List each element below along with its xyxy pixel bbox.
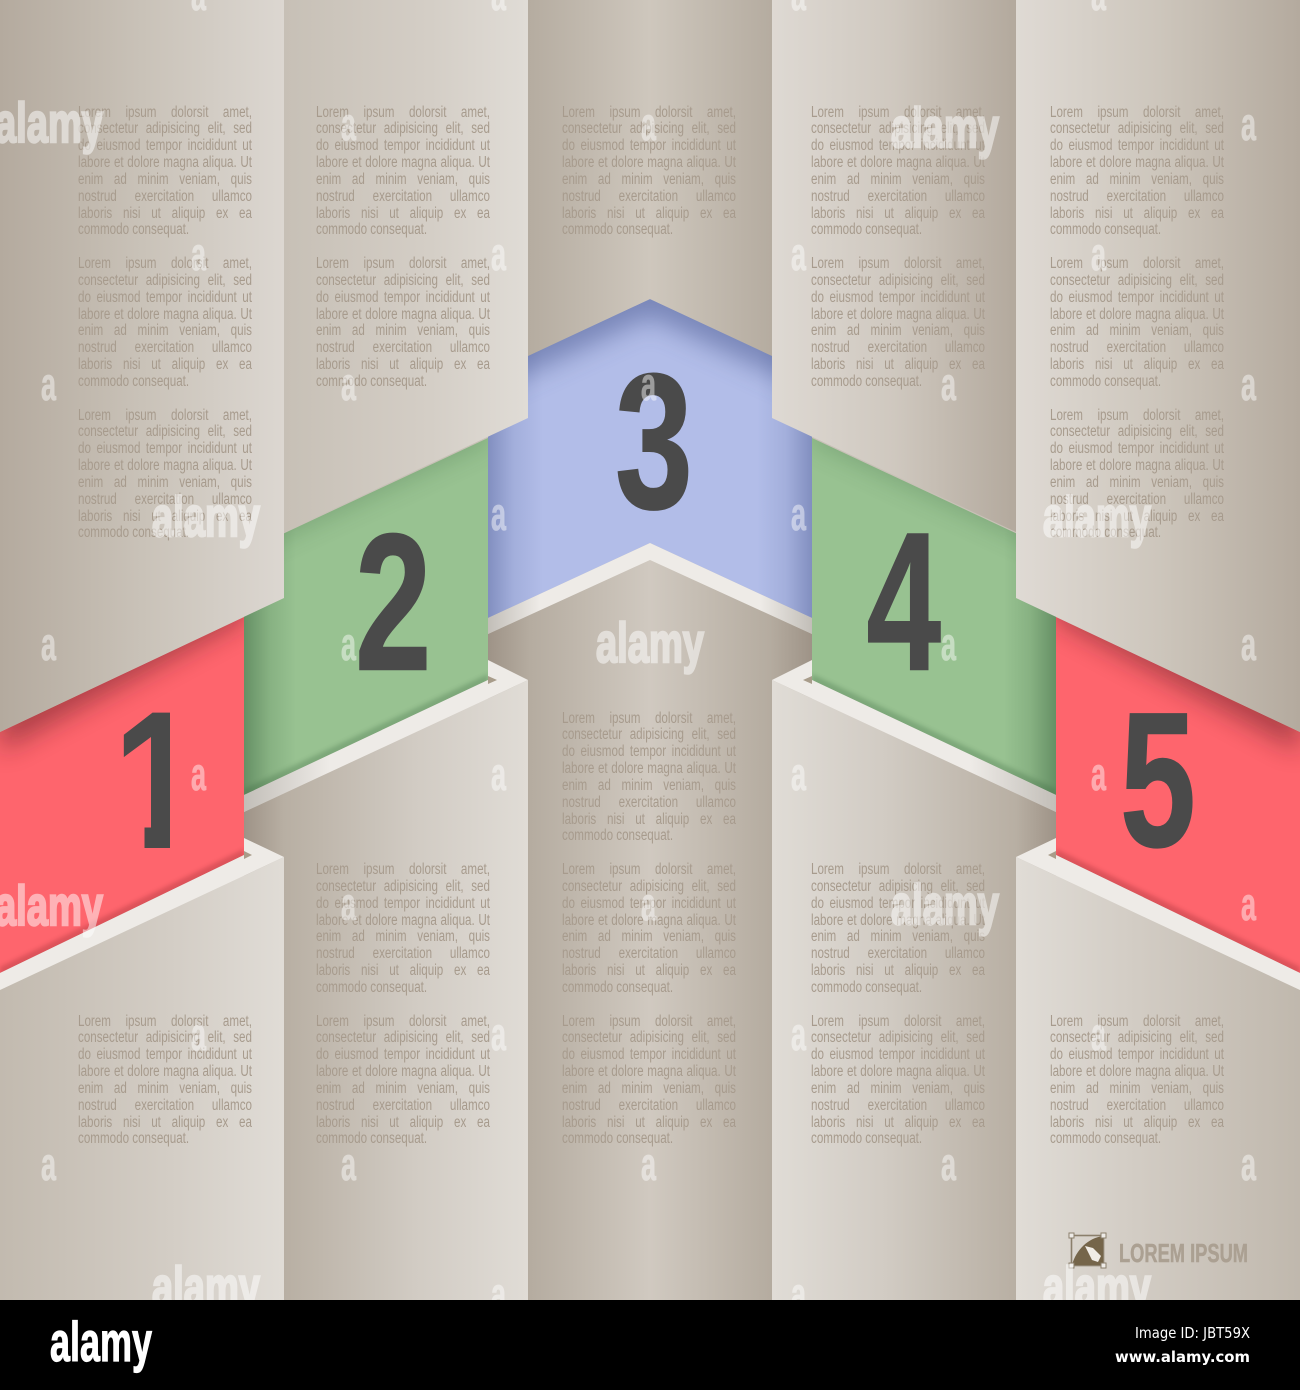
lower column 4 paragraph 1: commodo consequat. — [811, 979, 922, 996]
watermark wordmarks: alamy — [891, 873, 999, 936]
watermark small letters: a — [41, 358, 56, 410]
text column 1 upper — [78, 104, 252, 541]
lower column 4 paragraph 2: consectetur adipisicing elit, sed — [811, 1029, 985, 1046]
column 4 paragraph 1: Lorem ipsum dolorsit amet, — [811, 104, 985, 120]
column 2 paragraph 1: consectetur adipisicing elit, sed — [316, 120, 490, 137]
column 3 paragraph 1 — [562, 104, 736, 238]
column 1 paragraph 2: enim ad minim veniam, quis — [78, 322, 252, 339]
column 1 paragraph 2 — [78, 255, 252, 390]
column 4 paragraph 1: laboris nisi ut aliquip ex ea — [811, 205, 985, 222]
lower column 2 paragraph 1: enim ad minim veniam, quis — [316, 928, 490, 945]
column 3 paragraph 1: consectetur adipisicing elit, sed — [562, 120, 736, 137]
column 2 paragraph 1: do eiusmod tempor incididunt ut — [316, 137, 490, 154]
column 2 paragraph 2: Lorem ipsum dolorsit amet, — [316, 255, 490, 272]
lower column 2 paragraph 2: do eiusmod tempor incididunt ut — [316, 1046, 490, 1063]
lower column 3 paragraph 2: do eiusmod tempor incididunt ut — [562, 895, 736, 912]
lower column 2 paragraph 1: consectetur adipisicing elit, sed — [316, 878, 490, 895]
column 4 paragraph 1: do eiusmod tempor incididunt ut — [811, 137, 985, 154]
column 5 paragraph 2: laboris nisi ut aliquip ex ea — [1050, 356, 1224, 373]
column 4 paragraph 2 — [811, 255, 985, 390]
lower column 1 paragraph: Lorem ipsum dolorsit amet, — [78, 1012, 252, 1030]
number 2: 2 — [355, 493, 431, 711]
lower column 3 paragraph 2: enim ad minim veniam, quis — [562, 928, 736, 945]
lower column 3 paragraph 1: enim ad minim veniam, quis — [562, 777, 736, 794]
column 4 paragraph 2: do eiusmod tempor incididunt ut — [811, 289, 985, 306]
watermark small letters: a — [641, 358, 656, 410]
number 3: 3 — [615, 333, 693, 549]
watermark small letters: a — [1241, 618, 1256, 670]
column 2 paragraph 1: nostrud exercitation ullamco — [316, 188, 490, 205]
column 4 paragraph 1: consectetur adipisicing elit, sed — [811, 120, 985, 137]
column 5 paragraph 3: do eiusmod tempor incididunt ut — [1050, 440, 1224, 457]
lower column 3 paragraph 1: consectetur adipisicing elit, sed — [562, 726, 736, 743]
column 1 paragraph 1: nostrud exercitation ullamco — [78, 188, 252, 205]
column 5 paragraph 3: labore et dolore magna aliqua. Ut — [1050, 457, 1224, 474]
watermark small letters: a — [191, 228, 206, 280]
column 5 paragraph 1: do eiusmod tempor incididunt ut — [1050, 137, 1224, 154]
text column 5 upper — [1050, 104, 1224, 541]
logo wordmark: LOREM IPSUM — [1119, 1238, 1248, 1268]
lower column 5 paragraph: do eiusmod tempor incididunt ut — [1050, 1046, 1224, 1063]
watermark small letters: a — [641, 1138, 656, 1190]
number 5: 5 — [1120, 673, 1196, 888]
band 4: green — [812, 416, 1056, 805]
lower column 5 paragraph: commodo consequat. — [1050, 1130, 1161, 1147]
column 2 paragraph 2: labore et dolore magna aliqua. Ut — [316, 306, 490, 323]
lower column 3 paragraph 3: labore et dolore magna aliqua. Ut — [562, 1063, 736, 1080]
column 1 paragraph 3: do eiusmod tempor incididunt ut — [78, 440, 252, 457]
lower column 3 paragraph 2: labore et dolore magna aliqua. Ut — [562, 912, 736, 929]
watermark wordmarks: alamy — [596, 611, 704, 674]
column 1 paragraph 3: laboris nisi ut aliquip ex ea — [78, 508, 252, 525]
column 4 paragraph 1: nostrud exercitation ullamco — [811, 188, 985, 205]
watermark small letters: a — [941, 1138, 956, 1190]
column 5 paragraph 1 — [1050, 104, 1224, 238]
icon: pen tool logo — [1069, 1233, 1106, 1268]
column 5 paragraph 3: laboris nisi ut aliquip ex ea — [1050, 508, 1224, 525]
watermark small letters: a — [41, 618, 56, 670]
lower column 1 paragraph: labore et dolore magna aliqua. Ut — [78, 1063, 252, 1080]
column 2 paragraph 2: nostrud exercitation ullamco — [316, 339, 490, 356]
column 3 paragraph 1: enim ad minim veniam, quis — [562, 171, 736, 188]
column 4 paragraph 2: enim ad minim veniam, quis — [811, 322, 985, 339]
lower column 4 paragraph 2: labore et dolore magna aliqua. Ut — [811, 1063, 985, 1080]
lower column 1 paragraph: do eiusmod tempor incididunt ut — [78, 1046, 252, 1063]
column 2 paragraph 2: laboris nisi ut aliquip ex ea — [316, 356, 490, 373]
column 5 paragraph 3: commodo consequat. — [1050, 524, 1161, 541]
column 3 paragraph 1: laboris nisi ut aliquip ex ea — [562, 205, 736, 222]
column 1 paragraph 3: consectetur adipisicing elit, sed — [78, 423, 252, 440]
column 5 paragraph 2: do eiusmod tempor incididunt ut — [1050, 289, 1224, 306]
lower panel: column 1 — [0, 857, 284, 1300]
lower column 4 paragraph 1 — [811, 861, 985, 996]
lower column 4 paragraph 2: laboris nisi ut aliquip ex ea — [811, 1114, 985, 1131]
column 1 paragraph 2: do eiusmod tempor incididunt ut — [78, 289, 252, 306]
watermark small letters: a — [191, 748, 206, 800]
column 1 paragraph 2: consectetur adipisicing elit, sed — [78, 272, 252, 289]
watermark wordmarks: alamy — [152, 485, 260, 548]
column 5 paragraph 2: labore et dolore magna aliqua. Ut — [1050, 306, 1224, 323]
column 2 paragraph 2: commodo consequat. — [316, 373, 427, 390]
column 4 paragraph 2: laboris nisi ut aliquip ex ea — [811, 356, 985, 373]
watermark small letters: a — [1091, 228, 1106, 280]
column 4 paragraph 2: consectetur adipisicing elit, sed — [811, 272, 985, 289]
lower column 3 paragraph 3 — [562, 1012, 736, 1147]
watermark small letters: a — [491, 748, 506, 800]
lower column 3 paragraph 2: Lorem ipsum dolorsit amet, — [562, 861, 736, 878]
lower column 4 paragraph 1: enim ad minim veniam, quis — [811, 928, 985, 945]
column 1 paragraph 3 — [78, 406, 252, 541]
column 5 paragraph 1: Lorem ipsum dolorsit amet, — [1050, 104, 1224, 120]
watermark small letters: a — [341, 1138, 356, 1190]
lower column 4 paragraph 2 — [811, 1012, 985, 1147]
blue chevron white edge strip — [488, 543, 812, 634]
column 3 paragraph 1: Lorem ipsum dolorsit amet, — [562, 104, 736, 120]
upper panel: column 1 — [0, 0, 284, 732]
column 2 paragraph 1: labore et dolore magna aliqua. Ut — [316, 154, 490, 171]
lower column 2 paragraph 2: laboris nisi ut aliquip ex ea — [316, 1114, 490, 1131]
column 5 paragraph 2: enim ad minim veniam, quis — [1050, 322, 1224, 339]
lower column 2 paragraph 2 — [316, 1012, 490, 1147]
column 5 paragraph 2: nostrud exercitation ullamco — [1050, 339, 1224, 356]
text column 1 lower — [78, 1012, 252, 1147]
column 4 paragraph 1: enim ad minim veniam, quis — [811, 171, 985, 188]
column 5 paragraph 2: commodo consequat. — [1050, 373, 1161, 390]
column 1 paragraph 2: labore et dolore magna aliqua. Ut — [78, 306, 252, 323]
text column 5 lower — [1050, 1012, 1224, 1147]
column 1 paragraph 1: Lorem ipsum dolorsit amet, — [78, 104, 252, 120]
band 1: red — [0, 617, 244, 973]
column 4 paragraph 2: labore et dolore magna aliqua. Ut — [811, 306, 985, 323]
column 5 paragraph 1: laboris nisi ut aliquip ex ea — [1050, 205, 1224, 222]
column 4 paragraph 2: nostrud exercitation ullamco — [811, 339, 985, 356]
watermark small letters: a — [791, 748, 806, 800]
watermark small letters: a — [341, 878, 356, 930]
column 5 paragraph 1: labore et dolore magna aliqua. Ut — [1050, 154, 1224, 171]
column 5 paragraph 1: commodo consequat. — [1050, 221, 1161, 238]
upper panel: column 5 — [1016, 0, 1300, 732]
watermark small letters: a — [1241, 1138, 1256, 1190]
lower column 3 paragraph 1: do eiusmod tempor incididunt ut — [562, 743, 736, 760]
watermark small letters: a — [341, 618, 356, 670]
lower column 3 paragraph 3: laboris nisi ut aliquip ex ea — [562, 1114, 736, 1131]
watermark small letters: a — [941, 618, 956, 670]
lower column 5 paragraph: consectetur adipisicing elit, sed — [1050, 1029, 1224, 1046]
lower column 2 paragraph 2: labore et dolore magna aliqua. Ut — [316, 1063, 490, 1080]
watermark small letters: a — [641, 98, 656, 150]
lower column 4 paragraph 1: labore et dolore magna aliqua. Ut — [811, 912, 985, 929]
watermark small letters: a — [641, 878, 656, 930]
upper panel: column 4 — [772, 0, 1016, 532]
column 4 paragraph 1 — [811, 104, 985, 238]
column 5 paragraph 2 — [1050, 255, 1224, 390]
lower column 1 paragraph: enim ad minim veniam, quis — [78, 1080, 252, 1097]
column 3 paragraph 1: nostrud exercitation ullamco — [562, 188, 736, 205]
lower column 2 paragraph 1: do eiusmod tempor incididunt ut — [316, 895, 490, 912]
column 2 paragraph 2: do eiusmod tempor incididunt ut — [316, 289, 490, 306]
lower column 2 paragraph 2: enim ad minim veniam, quis — [316, 1080, 490, 1097]
column 3 paragraph 1: labore et dolore magna aliqua. Ut — [562, 154, 736, 171]
column 2 paragraph 1 — [316, 104, 490, 238]
column 5 paragraph 1: enim ad minim veniam, quis — [1050, 171, 1224, 188]
text column 3 lower — [562, 710, 736, 1147]
watermark small letters: a — [491, 488, 506, 540]
text column 2 upper — [316, 104, 490, 390]
watermark wordmarks: alamy — [891, 96, 999, 159]
lower column 2 paragraph 1: commodo consequat. — [316, 979, 427, 996]
lower column 1 paragraph: laboris nisi ut aliquip ex ea — [78, 1114, 252, 1131]
column 1 paragraph 2: nostrud exercitation ullamco — [78, 339, 252, 356]
lower column 4 paragraph 2: do eiusmod tempor incididunt ut — [811, 1046, 985, 1063]
column 5 paragraph 3: Lorem ipsum dolorsit amet, — [1050, 406, 1224, 424]
column 5 paragraph 1: consectetur adipisicing elit, sed — [1050, 120, 1224, 137]
band 5: red — [1056, 617, 1300, 973]
lower column 3 paragraph 2: consectetur adipisicing elit, sed — [562, 878, 736, 895]
column 5 paragraph 3: enim ad minim veniam, quis — [1050, 474, 1224, 491]
lower column 2 paragraph 2: commodo consequat. — [316, 1130, 427, 1147]
green 4 white edge strip — [772, 660, 1056, 812]
watermark small letters: a — [341, 358, 356, 410]
text column 2 lower — [316, 861, 490, 1147]
lower column 5 paragraph: laboris nisi ut aliquip ex ea — [1050, 1114, 1224, 1131]
watermark small letters: a — [791, 228, 806, 280]
watermark small letters: a — [791, 1268, 806, 1320]
band 3: blue chevron — [488, 299, 812, 618]
watermark wordmarks: alamy — [1043, 485, 1151, 548]
column 1 paragraph 1: labore et dolore magna aliqua. Ut — [78, 154, 252, 171]
column 2 paragraph 2: enim ad minim veniam, quis — [316, 322, 490, 339]
lower column 1 paragraph: consectetur adipisicing elit, sed — [78, 1029, 252, 1046]
lower column 2 paragraph 1: labore et dolore magna aliqua. Ut — [316, 912, 490, 929]
lower column 3 paragraph 3: Lorem ipsum dolorsit amet, — [562, 1012, 736, 1030]
lower column 3 paragraph 2: commodo consequat. — [562, 979, 673, 996]
watermark small letters: a — [491, 228, 506, 280]
watermark small letters: a — [491, 1008, 506, 1060]
column 1 paragraph 3: Lorem ipsum dolorsit amet, — [78, 406, 252, 424]
number 1: 1 — [113, 671, 205, 890]
footer alamy logo: alamy — [50, 1310, 152, 1373]
column 2 paragraph 2 — [316, 255, 490, 390]
lower column 3 paragraph 1: laboris nisi ut aliquip ex ea — [562, 811, 736, 828]
watermark small letters: a — [491, 1268, 506, 1320]
lower panel: column 5 — [1016, 857, 1300, 1300]
column 5 paragraph 2: consectetur adipisicing elit, sed — [1050, 272, 1224, 289]
watermark small letters: a — [1241, 358, 1256, 410]
column 1 paragraph 1: laboris nisi ut aliquip ex ea — [78, 205, 252, 222]
column 5 paragraph 1: nostrud exercitation ullamco — [1050, 188, 1224, 205]
lower column 3 paragraph 2 — [562, 861, 736, 996]
watermark wordmarks: alamy — [152, 1255, 260, 1318]
lower column 3 paragraph 2: laboris nisi ut aliquip ex ea — [562, 962, 736, 979]
lower column 3 paragraph 2: nostrud exercitation ullamco — [562, 945, 736, 962]
lower column 4 paragraph 1: laboris nisi ut aliquip ex ea — [811, 962, 985, 979]
lower column 3 paragraph 1: nostrud exercitation ullamco — [562, 794, 736, 811]
lower column 2 paragraph 1: laboris nisi ut aliquip ex ea — [316, 962, 490, 979]
watermark small letters: a — [1241, 878, 1256, 930]
column 1 paragraph 3: commodo consequat. — [78, 524, 189, 541]
footer website: www.alamy.com — [1115, 1348, 1250, 1366]
lower column 2 paragraph 1: Lorem ipsum dolorsit amet, — [316, 861, 490, 878]
lower column 4 paragraph 1: nostrud exercitation ullamco — [811, 945, 985, 962]
watermark small letters: a — [1241, 98, 1256, 150]
lower column 4 paragraph 2: nostrud exercitation ullamco — [811, 1097, 985, 1114]
column 4 paragraph 1: labore et dolore magna aliqua. Ut — [811, 154, 985, 171]
lower column 4 paragraph 2: enim ad minim veniam, quis — [811, 1080, 985, 1097]
column 5 paragraph 3: nostrud exercitation ullamco — [1050, 491, 1224, 508]
column 2 paragraph 1: laboris nisi ut aliquip ex ea — [316, 205, 490, 222]
black footer bar — [0, 1300, 1300, 1390]
lower column 2 paragraph 1 — [316, 861, 490, 996]
lower column 5 paragraph: labore et dolore magna aliqua. Ut — [1050, 1063, 1224, 1080]
lower column 5 paragraph: Lorem ipsum dolorsit amet, — [1050, 1012, 1224, 1030]
column 5 paragraph 3: consectetur adipisicing elit, sed — [1050, 423, 1224, 440]
column 4 paragraph 2: commodo consequat. — [811, 373, 922, 390]
lower column 3 paragraph 1 — [562, 710, 736, 844]
green 2 white edge strip — [244, 660, 528, 812]
lower column 5 paragraph: enim ad minim veniam, quis — [1050, 1080, 1224, 1097]
column 2 paragraph 1: Lorem ipsum dolorsit amet, — [316, 104, 490, 120]
footer image id: Image ID: JBT59X — [1135, 1324, 1250, 1342]
upper panel: column 3 — [528, 0, 772, 356]
lower column 2 paragraph 1: nostrud exercitation ullamco — [316, 945, 490, 962]
lower column 1 paragraph — [78, 1012, 252, 1147]
lower column 3 paragraph 1: labore et dolore magna aliqua. Ut — [562, 760, 736, 777]
column 1 paragraph 1: consectetur adipisicing elit, sed — [78, 120, 252, 137]
column 4 paragraph 1: commodo consequat. — [811, 221, 922, 238]
lower column 4 paragraph 2: commodo consequat. — [811, 1130, 922, 1147]
column 3 paragraph 1: commodo consequat. — [562, 221, 673, 238]
column 5 paragraph 3 — [1050, 406, 1224, 541]
upper panel: column 2 — [284, 0, 528, 532]
lower panel: column 4 — [772, 680, 1056, 1300]
watermark wordmarks — [0, 91, 1151, 1318]
lower column 3 paragraph 3: nostrud exercitation ullamco — [562, 1097, 736, 1114]
watermark small letters: a — [791, 488, 806, 540]
lower column 3 paragraph 1: commodo consequat. — [562, 827, 673, 844]
watermark wordmarks: alamy — [1043, 1255, 1151, 1318]
watermark small letters: a — [341, 98, 356, 150]
watermark small letters: a — [1091, 748, 1106, 800]
watermark small letters: a — [941, 358, 956, 410]
lower column 3 paragraph 1: Lorem ipsum dolorsit amet, — [562, 710, 736, 726]
lower panel: column 3 — [488, 560, 812, 1300]
watermark small letters: a — [791, 1008, 806, 1060]
column 2 paragraph 2: consectetur adipisicing elit, sed — [316, 272, 490, 289]
lower column 2 paragraph 2: Lorem ipsum dolorsit amet, — [316, 1012, 490, 1030]
column 1 paragraph 1 — [78, 104, 252, 238]
column 1 paragraph 1: do eiusmod tempor incididunt ut — [78, 137, 252, 154]
red 5 white edge strip — [1016, 838, 1300, 990]
lower column 4 paragraph 1: do eiusmod tempor incididunt ut — [811, 895, 985, 912]
lower column 3 paragraph 3: enim ad minim veniam, quis — [562, 1080, 736, 1097]
lower column 1 paragraph: commodo consequat. — [78, 1130, 189, 1147]
lower panel: column 2 — [244, 680, 528, 1300]
column 4 paragraph 2: Lorem ipsum dolorsit amet, — [811, 255, 985, 272]
text column 3 upper — [562, 104, 736, 238]
column 1 paragraph 3: nostrud exercitation ullamco — [78, 491, 252, 508]
column 5 paragraph 2: Lorem ipsum dolorsit amet, — [1050, 255, 1224, 272]
column 2 paragraph 1: enim ad minim veniam, quis — [316, 171, 490, 188]
lower column 3 paragraph 3: commodo consequat. — [562, 1130, 673, 1147]
lower column 2 paragraph 2: nostrud exercitation ullamco — [316, 1097, 490, 1114]
column 1 paragraph 2: laboris nisi ut aliquip ex ea — [78, 356, 252, 373]
column 1 paragraph 3: enim ad minim veniam, quis — [78, 474, 252, 491]
lower column 4 paragraph 1: Lorem ipsum dolorsit amet, — [811, 861, 985, 878]
red 1 white edge strip — [0, 838, 284, 990]
column 2 paragraph 1: commodo consequat. — [316, 221, 427, 238]
lower column 3 paragraph 3: consectetur adipisicing elit, sed — [562, 1029, 736, 1046]
column 1 paragraph 1: commodo consequat. — [78, 221, 189, 238]
column 3 paragraph 1: do eiusmod tempor incididunt ut — [562, 137, 736, 154]
column 1 paragraph 1: enim ad minim veniam, quis — [78, 171, 252, 188]
column 1 paragraph 2: commodo consequat. — [78, 373, 189, 390]
lower column 5 paragraph — [1050, 1012, 1224, 1147]
band 2: green — [244, 416, 488, 805]
lower column 1 paragraph: nostrud exercitation ullamco — [78, 1097, 252, 1114]
lower column 4 paragraph 2: Lorem ipsum dolorsit amet, — [811, 1012, 985, 1030]
column 1 paragraph 3: labore et dolore magna aliqua. Ut — [78, 457, 252, 474]
lower column 4 paragraph 1: consectetur adipisicing elit, sed — [811, 878, 985, 895]
column 1 paragraph 2: Lorem ipsum dolorsit amet, — [78, 255, 252, 272]
lower column 3 paragraph 3: do eiusmod tempor incididunt ut — [562, 1046, 736, 1063]
lower column 5 paragraph: nostrud exercitation ullamco — [1050, 1097, 1224, 1114]
watermark small letters: a — [41, 1138, 56, 1190]
watermark small letters: a — [191, 1008, 206, 1060]
lower column 2 paragraph 2: consectetur adipisicing elit, sed — [316, 1029, 490, 1046]
watermark small letters: a — [1091, 1008, 1106, 1060]
number 4: 4 — [866, 492, 941, 712]
text column 4 lower — [811, 861, 985, 1147]
text column 4 upper — [811, 104, 985, 390]
